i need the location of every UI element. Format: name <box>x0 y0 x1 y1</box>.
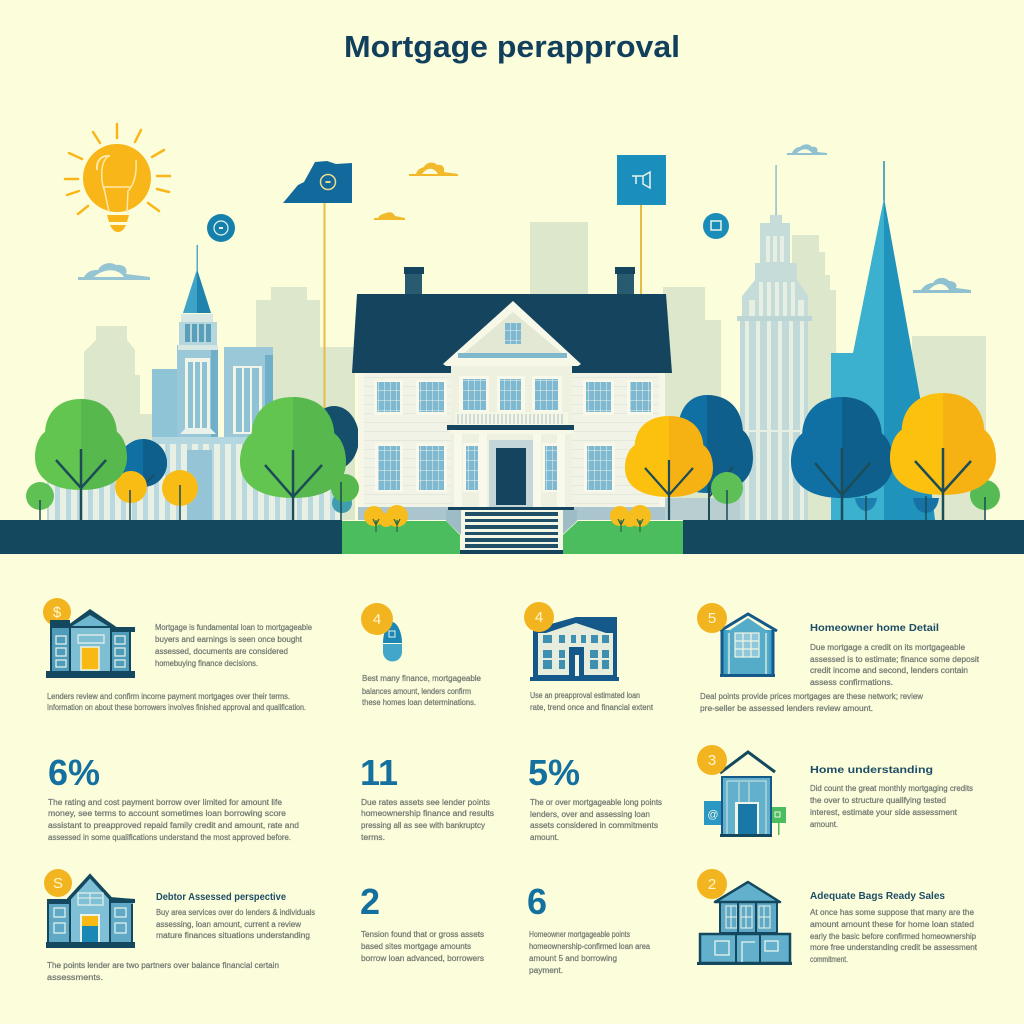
icon: blue badge left <box>207 214 235 242</box>
balcony railing <box>447 412 574 434</box>
text block: Tension found that or gross assets <box>361 930 484 939</box>
tree: green large centre-left <box>240 397 346 520</box>
ground strip left <box>0 520 342 554</box>
stat: 11: 11 <box>360 752 398 793</box>
entrance steps <box>446 507 577 554</box>
cloud left <box>78 263 150 280</box>
title: Mortgage perapproval <box>344 29 680 64</box>
tree: yellow large right <box>890 393 996 520</box>
cloud top right <box>787 144 827 155</box>
icon: house with coin <box>697 603 777 677</box>
text block: lenders, over and assessing loan <box>530 810 650 819</box>
heading: Debtor Assessed perspective <box>156 892 286 903</box>
text block: amount amount these for home loan stated <box>810 920 974 929</box>
text block lower: The points lender are two partners over balance financial certain <box>47 961 279 970</box>
text block lower: assessments. <box>47 973 103 982</box>
text block: assessed in some qualifications understand the most approved before. <box>48 833 291 842</box>
tree: blue large right <box>791 397 893 520</box>
stat: 11 <box>360 752 494 842</box>
tree: small green <box>711 472 743 520</box>
stat: 5% <box>528 752 662 842</box>
tree: small yellow <box>162 470 198 520</box>
foundation <box>358 507 665 520</box>
heading: Home understanding <box>810 765 933 776</box>
text block: Best many finance, mortgageable <box>362 674 482 683</box>
text block: mature finances situations understanding <box>156 931 310 940</box>
text block <box>530 691 654 712</box>
stat: 2: 2 <box>360 881 380 922</box>
door <box>496 448 526 505</box>
tree: navy behind left of house <box>309 406 359 470</box>
icon: two-storey house with coin: 2 <box>708 876 716 893</box>
text block <box>810 784 973 829</box>
text block lower <box>47 692 306 712</box>
text block lower: pre-seller be assessed lenders review amount. <box>700 704 873 713</box>
text block: credit income and second, lenders contain <box>810 666 968 675</box>
tree: yellow right of house <box>625 416 713 520</box>
icon: house with signs and coin: 3 <box>708 752 716 769</box>
text block <box>361 930 484 963</box>
text block: At once has some suppose that many are the <box>810 908 975 917</box>
text block: Buy area services over do lenders & individuals <box>156 908 315 917</box>
text block: balances amount, lenders confirm <box>362 687 471 696</box>
text block: buyers and earnings is seen once bought <box>155 635 303 644</box>
text block <box>530 798 662 842</box>
mansion house <box>352 267 672 554</box>
pale skyline centre <box>530 222 588 302</box>
skyscraper right <box>737 165 812 520</box>
tree: small green left <box>26 482 54 520</box>
cloud yellow small <box>374 212 405 220</box>
text block lower <box>700 692 923 713</box>
tree: small blue <box>913 496 939 520</box>
panel: item 7 <box>697 869 978 965</box>
yellow pole left with map flag <box>283 161 352 408</box>
text block: assessed, documents are considered <box>155 647 288 656</box>
icon: house with signs and coin: @ <box>707 809 719 821</box>
text block: amount. <box>810 820 838 829</box>
cloud yellow large <box>409 163 458 176</box>
icon: two-storey house with coin <box>697 869 792 965</box>
blue spire tower <box>831 161 935 520</box>
door surround <box>489 440 533 507</box>
tree: small blue-green at house edge <box>331 474 359 520</box>
text block <box>529 930 651 975</box>
text block lower: Information on about these borrowers involves finished approval and qualification. <box>47 703 306 712</box>
stat: 5%: 5% <box>528 752 580 793</box>
text block: Mortgage is fundamental loan to mortgageable <box>155 623 313 632</box>
windows upper row <box>374 376 653 415</box>
text block: amount. <box>530 833 559 842</box>
text block <box>155 623 313 668</box>
columns <box>454 434 565 507</box>
tree: small green right <box>970 480 1000 520</box>
text block <box>156 908 315 940</box>
icon: house with coin: 5 <box>708 610 716 627</box>
lawn right <box>563 521 683 554</box>
text block: commitment. <box>810 955 848 964</box>
ground strip right <box>683 520 1024 554</box>
text block: Due rates assets see lender points <box>361 798 490 807</box>
central bay <box>451 364 572 507</box>
text block: pressing all as see with bankruptcy <box>361 821 485 830</box>
text block: homeownership-confirmed loan area <box>529 942 651 951</box>
text block: assets considered in commitments <box>530 821 658 830</box>
text block: Due mortgage a credit on its mortgageable <box>810 643 966 652</box>
text block lower: Deal points provide prices mortgages are these network; review <box>700 692 923 701</box>
corner boards <box>358 373 665 507</box>
text block: homeownership finance and results <box>361 809 494 818</box>
text block <box>810 908 978 964</box>
text block: The or over mortgageable long points <box>530 798 662 807</box>
text block: assessed is to estimate; finance some deposit <box>810 655 980 664</box>
icon: apartment building with coin: 4 <box>535 609 543 626</box>
light colonnade right <box>665 498 740 520</box>
heading: Homeowner home Detail <box>810 623 939 634</box>
icon: blue badge right <box>703 213 729 239</box>
yellow bushes left <box>364 505 408 532</box>
text block: Did count the great monthly mortgaging credits <box>810 784 973 793</box>
text block: early the basic before confirmed homeownership <box>810 932 977 941</box>
stat: 2 <box>360 881 484 963</box>
icon: bank house with coin: S <box>53 875 63 892</box>
pediment <box>443 301 581 366</box>
text block: more free understanding credit be assessment <box>810 943 978 952</box>
icon: bank house with coin <box>43 598 135 678</box>
chimney left <box>404 267 424 308</box>
text block: amount 5 and borrowing <box>529 954 617 963</box>
lawn left <box>342 521 460 554</box>
text block: based sites mortgage amounts <box>361 942 471 951</box>
panel: item 2 <box>361 603 482 707</box>
text block lower <box>47 961 279 982</box>
stat: 6%: 6% <box>48 752 100 793</box>
text block: homebuying finance decisions. <box>155 659 258 668</box>
text block: rate, trend once and financial extent <box>530 703 654 712</box>
cloud right <box>913 278 971 293</box>
panel: item 1 <box>43 598 313 712</box>
text block <box>810 643 980 687</box>
tree: green large left <box>35 399 127 520</box>
text block: these homes loan determinations. <box>362 698 476 707</box>
text block <box>48 798 299 842</box>
text block: borrow loan advanced, borrowers <box>361 954 484 963</box>
text block: assess confirmations. <box>810 678 893 687</box>
yellow bushes right <box>610 505 651 532</box>
text block: money, see terms to account sometimes loan borrowing score <box>48 809 287 818</box>
pale skyline left <box>84 287 355 520</box>
stat: 6% <box>48 752 299 842</box>
icon: bank house with coin <box>44 869 135 948</box>
stat: 6: 6 <box>527 881 547 922</box>
house body <box>358 373 665 507</box>
text block: terms. <box>361 833 385 842</box>
roof <box>352 294 672 373</box>
tree: small yellow <box>115 471 147 520</box>
icon: bank house with coin: $ <box>53 604 62 621</box>
tree: blue behind left <box>119 439 167 497</box>
icon: coin with capsule: 4 <box>373 611 381 628</box>
text block: assistant to preapproved repaid family credit and amount, rate and <box>48 821 299 830</box>
tree: small blue <box>855 496 877 520</box>
text block: assessing, loan amount, current a review <box>156 920 301 929</box>
chimney right <box>615 267 635 308</box>
text block lower: Lenders review and confirm income payment mortgages over their terms. <box>47 692 290 701</box>
tree: blue behind right of house <box>670 395 753 520</box>
text block: The rating and cost payment borrow over limited for amount life <box>48 798 283 807</box>
icon: house with signs and coin <box>697 745 786 837</box>
yellow pole right with square flag <box>617 155 666 297</box>
text block: Use an preapproval estimated loan <box>530 691 640 700</box>
text block: interest, estimate your side assessment <box>810 808 958 817</box>
city buildings left <box>152 245 273 444</box>
windows lower row <box>375 443 615 492</box>
icon: light bulb <box>65 124 170 232</box>
colonnade base left <box>47 437 342 520</box>
text block <box>362 674 482 707</box>
stat: 6 <box>527 881 651 975</box>
panel: item 4 <box>697 603 980 713</box>
text block: the over to structure qualifying tested <box>810 796 946 805</box>
panel: item 3 <box>524 602 654 712</box>
text block: payment. <box>529 966 563 975</box>
panel: item 6 <box>44 869 315 982</box>
panel: item 5 <box>697 745 973 837</box>
pale skyline right <box>663 235 986 520</box>
text block <box>361 798 494 842</box>
text block: Homeowner mortgageable points <box>529 930 630 939</box>
heading: Adequate Bags Ready Sales <box>810 891 945 902</box>
